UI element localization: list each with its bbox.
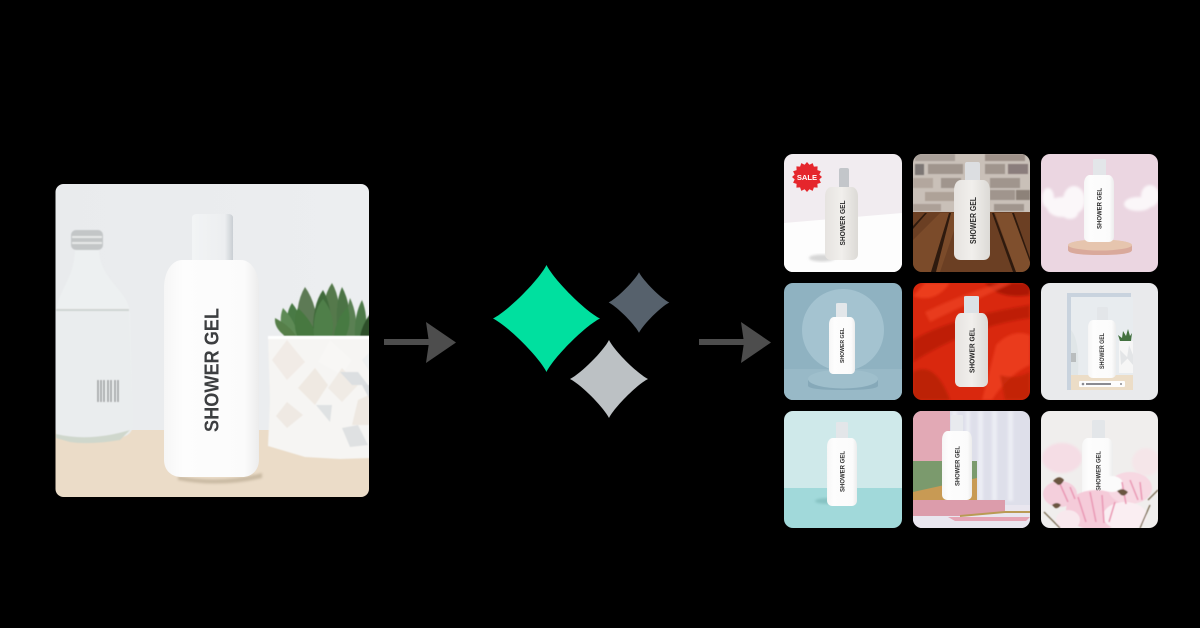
dark grey sparkle xyxy=(609,272,669,333)
mini plant and pot xyxy=(1118,329,1133,373)
thumbnail: teal two-tone xyxy=(784,411,902,528)
light grey sparkle xyxy=(570,340,648,418)
thumbnail: sale badge scene xyxy=(784,154,902,272)
thumbnail: pastel still life: SHOWER GEL xyxy=(954,446,961,486)
infographic canvas xyxy=(56,154,1158,528)
thumbnail: search result mockup xyxy=(1041,283,1158,400)
succulent plant xyxy=(275,283,370,336)
thumbnail: red silk xyxy=(913,283,1030,400)
thumbnail: pink clouds and podium: SHOWER GEL xyxy=(1096,188,1103,229)
thumbnail: pink flowers: SHOWER GEL xyxy=(1095,451,1102,491)
thumbnail: blue arch and podium xyxy=(784,283,902,400)
thumbnail: teal two-tone: SHOWER GEL xyxy=(839,451,846,492)
icon: sparkle stars xyxy=(493,265,669,418)
glass bottle xyxy=(56,230,133,443)
sale badge: SALE xyxy=(797,173,817,182)
thumbnail: brick wall and wood: SHOWER GEL xyxy=(969,197,978,244)
thumbnail: pink flowers xyxy=(1041,411,1160,530)
thumbnail: red silk: SHOWER GEL xyxy=(968,328,977,373)
main bottle xyxy=(164,214,262,484)
thumbnail: sale badge scene: SHOWER GEL xyxy=(838,200,847,246)
flower cluster xyxy=(1043,472,1158,530)
panel: original product photo xyxy=(55,184,370,498)
arrow: AI to outputs xyxy=(699,322,771,363)
thumbnail: search result mockup: SHOWER GEL xyxy=(1100,333,1106,369)
geometric white pot xyxy=(268,336,370,459)
thumbnail: pastel still life xyxy=(913,411,1030,528)
green sparkle xyxy=(493,265,600,372)
arrow: input to AI xyxy=(384,322,456,363)
thumbnail: pink clouds and podium xyxy=(1041,154,1159,272)
main bottle: SHOWER GEL xyxy=(200,308,223,432)
mini search bar xyxy=(1079,381,1125,387)
thumbnail: blue arch and podium: SHOWER GEL xyxy=(840,328,846,363)
thumbnail: brick wall and wood xyxy=(913,154,1030,272)
